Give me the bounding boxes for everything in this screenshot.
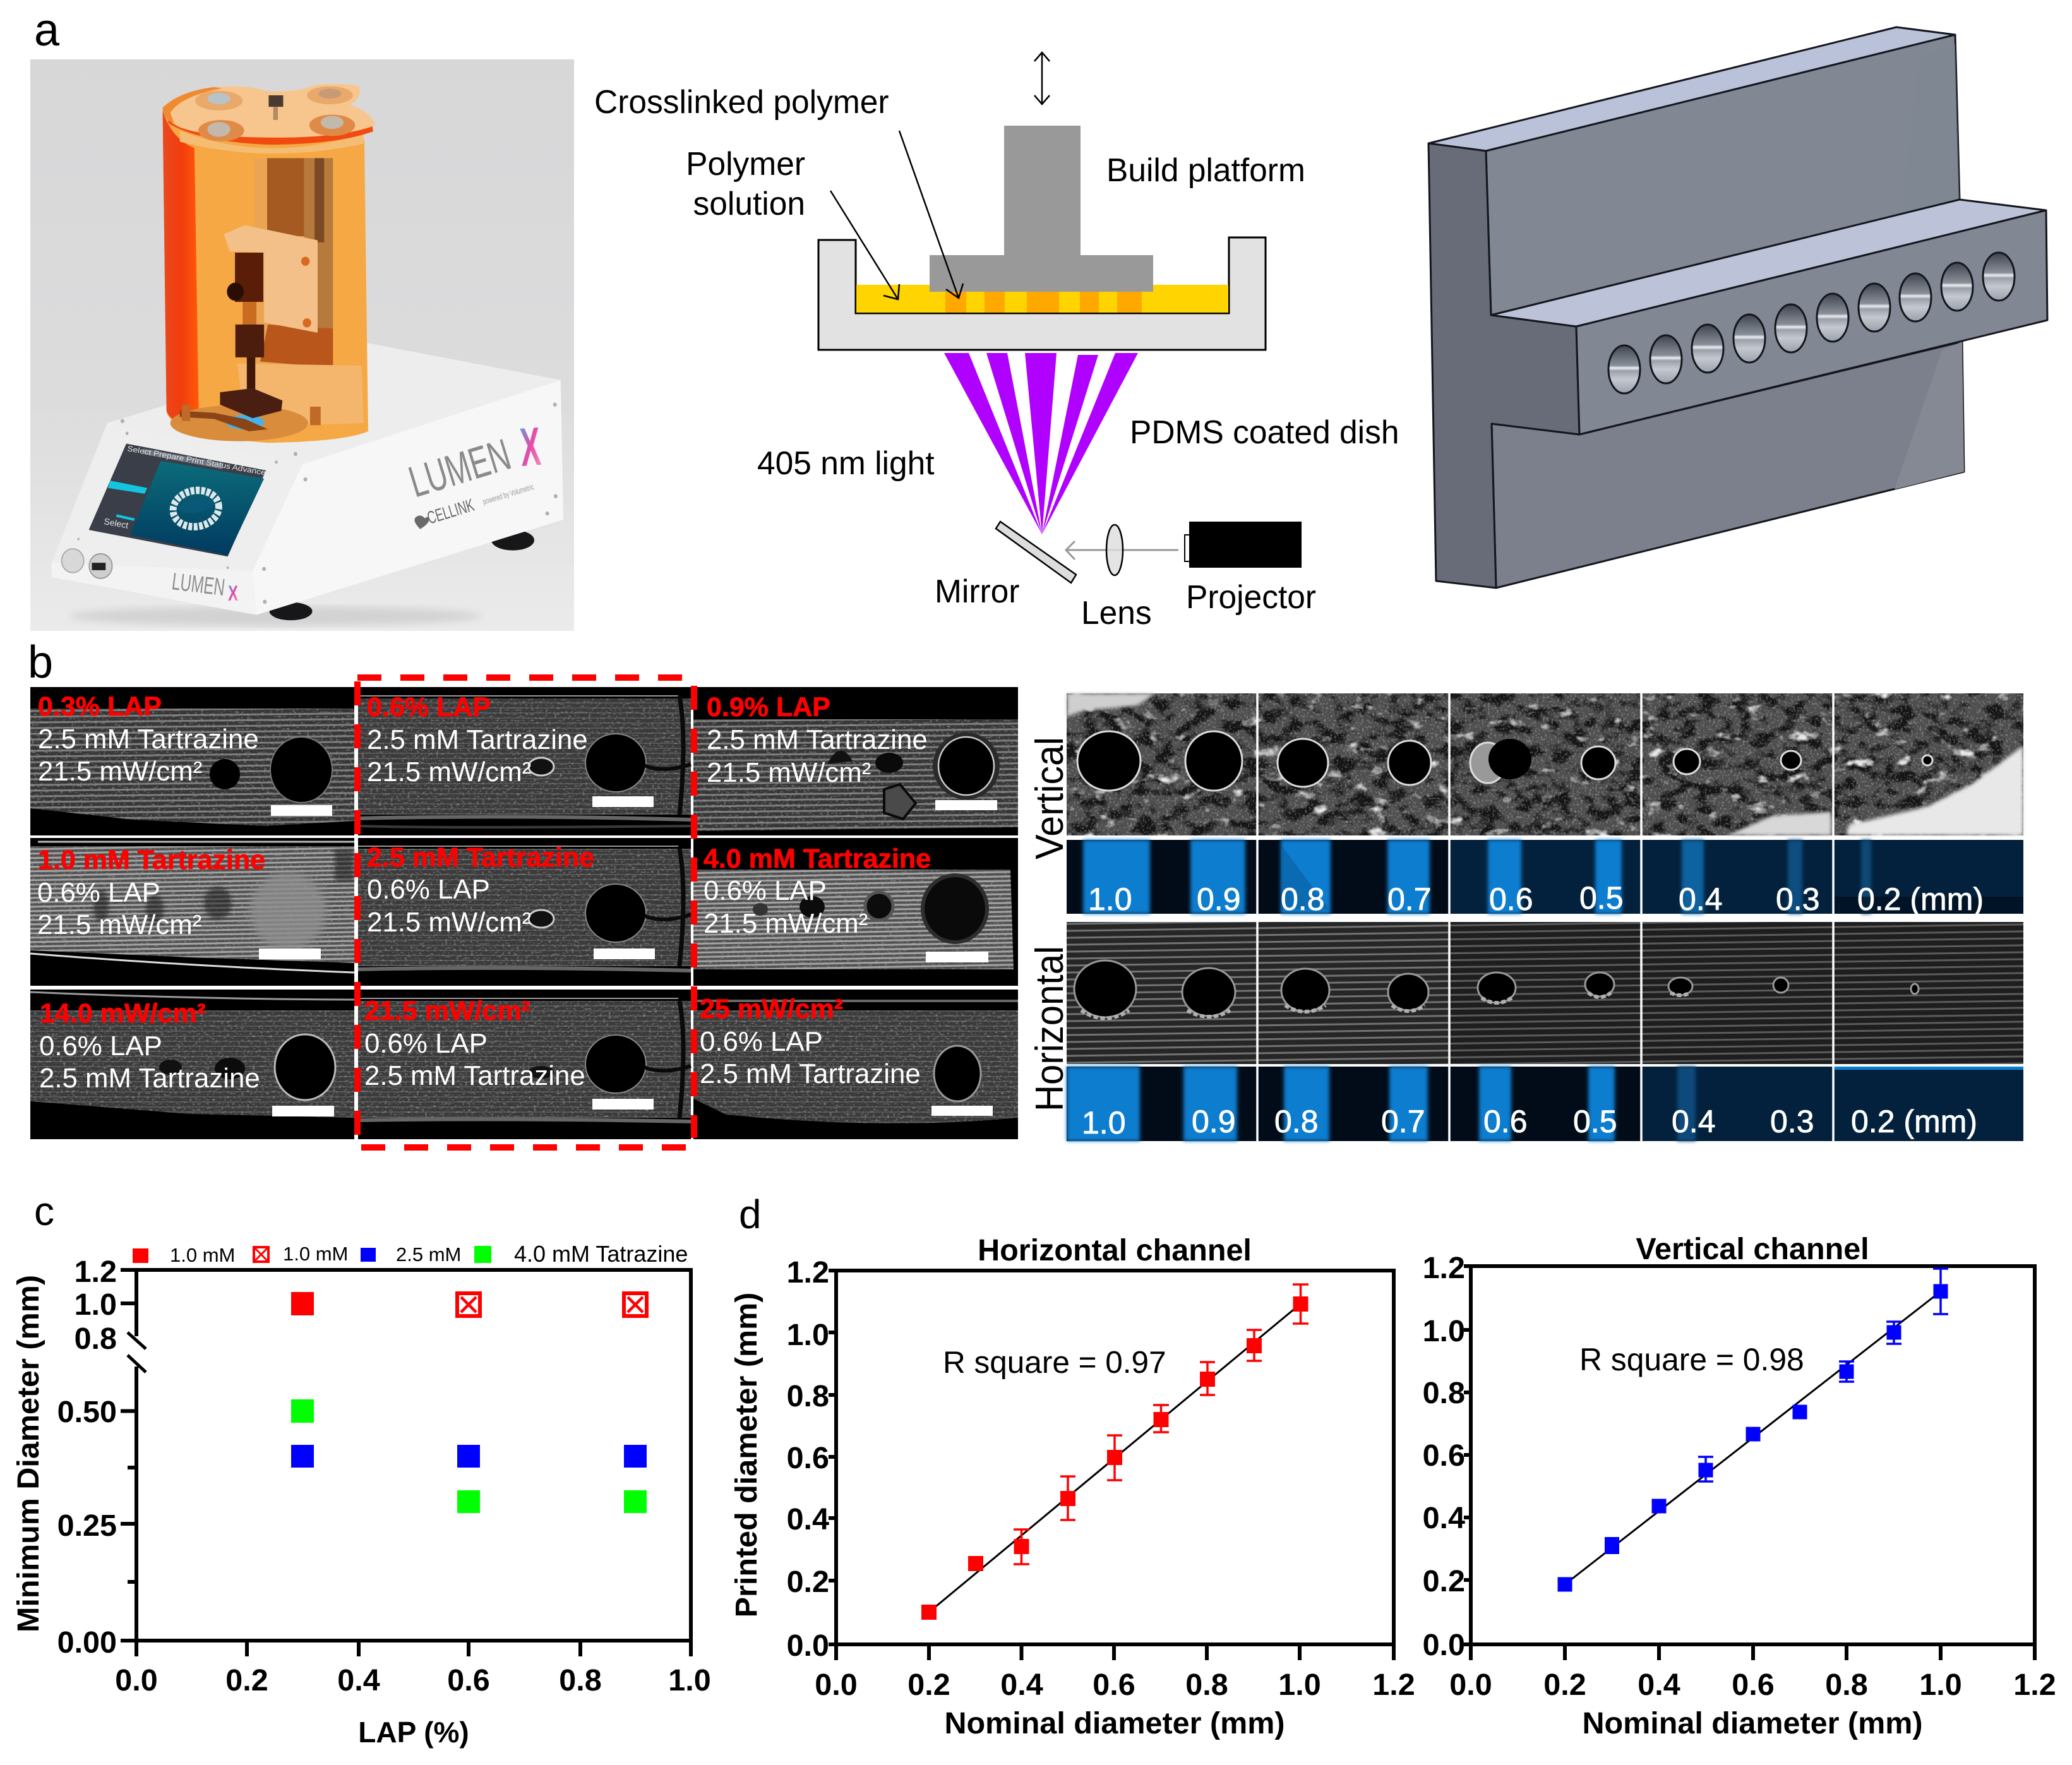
icon: vertical double arrow [1034, 52, 1050, 104]
panel: horizontal channel fluorescence: 0.6 [1483, 1104, 1528, 1139]
panel: horizontal channel fluorescence: 0.9 [1192, 1104, 1236, 1139]
micrograph 14.0 mW/cm2: 14.0 mW/cm² [40, 998, 206, 1029]
panel: chart c minimum diameter [11, 1241, 711, 1749]
micrograph 0.9% LAP: 0.9% LAP [707, 692, 830, 722]
fit line [1565, 1291, 1941, 1584]
x tick labels: 1.0 [668, 1663, 711, 1697]
panel: vertical channel fluorescence: 0.7 [1387, 882, 1432, 917]
panel: printing schematic [594, 52, 1399, 631]
label lens: Lens [1081, 594, 1152, 631]
build platform [930, 126, 1153, 292]
panel label b: b [28, 637, 53, 688]
text: LUMEN large: LUMEN [404, 429, 516, 506]
micrograph 25 mW/cm2 [693, 990, 1018, 1139]
schematic dish [818, 237, 1266, 350]
x tick labels: 0.4 [1638, 1668, 1680, 1702]
y tick labels [57, 1255, 117, 1660]
label 405 nm light: 405 nm light [757, 445, 935, 481]
micrograph 25 mW/cm2: 0.6% LAP [700, 1026, 823, 1057]
y tick labels: 0.4 [1423, 1501, 1465, 1535]
micrograph 1.0 mM Tartrazine: 21.5 mW/cm² [37, 909, 201, 940]
micrograph 2.5 mM Tartrazine: 0.6% LAP [367, 874, 490, 905]
label build platform: Build platform [1106, 152, 1305, 188]
y tick labels: 1.2 [75, 1255, 117, 1289]
panel: horizontal channel fluorescence [1067, 1067, 2023, 1141]
x tick labels: 0.6 [447, 1663, 490, 1697]
error bars [1014, 1284, 1308, 1564]
micrograph 4.0 mM Tartrazine [693, 838, 1018, 986]
panel: horizontal channel micrographs [1067, 922, 2023, 1064]
text: powered by Volumetric: powered by Volumetric [481, 482, 536, 506]
text: front LUMEN: LUMEN [171, 568, 226, 601]
micrograph 0.6% LAP [358, 687, 691, 835]
y tick labels: 1.0 [75, 1288, 117, 1322]
micrograph 21.5 mW/cm2: 2.5 mM Tartrazine [364, 1060, 585, 1091]
label mirror: Mirror [935, 573, 1019, 609]
error bars [1698, 1269, 1948, 1481]
y tick labels: 0.0 [1423, 1628, 1465, 1662]
y tick labels [787, 1255, 829, 1663]
x axis title: LAP (%) [358, 1716, 469, 1749]
y tick labels: 0.00 [57, 1625, 117, 1660]
axis break [128, 1332, 146, 1372]
x tick labels [115, 1663, 711, 1697]
chart title: Vertical channel [1636, 1232, 1869, 1266]
arrow: crosslinked polymer [899, 131, 963, 298]
y tick labels: 0.2 [787, 1565, 829, 1599]
axes frame [1471, 1266, 2035, 1644]
ticks [121, 1270, 691, 1656]
micrograph 0.3% LAP: 2.5 mM Tartrazine [38, 724, 259, 755]
data markers [291, 1292, 647, 1513]
y tick labels: 0.0 [787, 1629, 829, 1663]
micrograph 0.3% LAP [30, 687, 354, 835]
panel: vertical channel fluorescence: 0.5 [1579, 880, 1624, 916]
chart title: Horizontal channel [978, 1233, 1252, 1267]
micrograph 21.5 mW/cm2 [358, 990, 691, 1139]
panel: vertical channel fluorescence: 0.4 [1679, 882, 1723, 917]
x tick labels: 0.4 [1000, 1668, 1043, 1702]
panel label c: c [34, 1188, 54, 1234]
micrograph 1.0 mM Tartrazine: 1.0 mM Tartrazine [38, 845, 265, 875]
channel holes [1608, 253, 2015, 393]
legend [133, 1241, 688, 1267]
polymer solution [856, 285, 1228, 313]
x tick labels: 0.2 [225, 1663, 268, 1697]
micrograph 0.3% LAP: 0.3% LAP [38, 691, 162, 722]
data markers [1557, 1284, 1948, 1591]
y tick labels: 1.2 [787, 1255, 829, 1289]
x tick labels: 0.8 [1825, 1668, 1868, 1702]
panel: vertical channel fluorescence: 0.9 [1197, 882, 1241, 917]
label Horizontal: Horizontal [1028, 946, 1072, 1111]
label polymer solution: Polymer [686, 145, 805, 182]
panel: Lumen X printer photo [30, 59, 574, 631]
panel: chart vertical channel [1423, 1232, 2056, 1740]
x tick labels: 0.4 [337, 1663, 380, 1697]
r square note: R square = 0.97 [943, 1345, 1166, 1380]
ticks [829, 1271, 1394, 1660]
panel: LAP and tartrazine micrographs [30, 678, 1018, 1147]
fit line [929, 1304, 1300, 1612]
x tick labels: 0.8 [1185, 1668, 1228, 1702]
micrograph 2.5 mM Tartrazine: 2.5 mM Tartrazine [367, 842, 594, 873]
panel: vertical channel fluorescence: 0.6 [1489, 882, 1533, 917]
x tick labels: 0.8 [559, 1663, 602, 1697]
legend: 1.0 mM [283, 1243, 348, 1265]
axes frame [136, 1270, 691, 1641]
micrograph 1.0 mM Tartrazine: 0.6% LAP [37, 877, 160, 908]
x tick labels: 0.0 [815, 1668, 858, 1702]
legend: 4.0 mM Tatrazine [514, 1241, 688, 1267]
y tick labels: 1.2 [1423, 1251, 1465, 1285]
x tick labels: 0.2 [1543, 1668, 1586, 1702]
y tick labels: 0.8 [75, 1322, 117, 1356]
x tick labels: 1.0 [1919, 1668, 1962, 1702]
micrograph 4.0 mM Tartrazine: 21.5 mW/cm² [704, 908, 868, 939]
x axis title: Nominal diameter (mm) [945, 1706, 1285, 1740]
micrograph 25 mW/cm2: 25 mW/cm² [700, 994, 843, 1024]
mirror [996, 522, 1076, 583]
red dashed highlight box [357, 678, 694, 1147]
r square note: R square = 0.98 [1579, 1342, 1804, 1377]
y tick labels: 0.8 [787, 1379, 829, 1413]
y tick labels: 0.4 [787, 1502, 829, 1536]
y tick labels: 1.0 [787, 1318, 829, 1352]
panel: vertical channel fluorescence [1067, 840, 2023, 917]
micrograph 0.6% LAP: 2.5 mM Tartrazine [367, 724, 588, 755]
x tick labels [1449, 1668, 2056, 1702]
label Vertical: Vertical [1028, 737, 1072, 859]
panel label d: d [739, 1192, 762, 1237]
panel: horizontal channel fluorescence: 0.3 [1770, 1104, 1814, 1139]
x tick labels: 1.0 [1278, 1668, 1321, 1702]
x tick labels: 0.6 [1093, 1668, 1135, 1702]
text: CELLINK: CELLINK [425, 495, 477, 528]
panel: horizontal channel fluorescence: 0.8 [1274, 1104, 1319, 1139]
text: touch screen tabs: Select Prepare Print Status Advanced [126, 444, 271, 478]
x axis title: Nominal diameter (mm) [1583, 1706, 1922, 1740]
micrograph 25 mW/cm2: 2.5 mM Tartrazine [700, 1058, 921, 1089]
lens [1106, 525, 1123, 575]
micrograph 21.5 mW/cm2: 21.5 mW/cm² [364, 996, 530, 1026]
projector [1185, 522, 1302, 568]
panel: horizontal channel fluorescence: 0.4 [1672, 1104, 1716, 1139]
y tick labels [1423, 1251, 1465, 1662]
x tick labels [815, 1668, 1415, 1702]
light path arrow [1066, 541, 1178, 559]
y tick labels: 0.25 [57, 1509, 117, 1543]
micrograph 1.0 mM Tartrazine [30, 838, 354, 986]
y tick labels: 0.50 [57, 1395, 117, 1429]
x tick labels: 0.0 [115, 1663, 158, 1697]
micrograph 14.0 mW/cm2: 0.6% LAP [39, 1031, 162, 1062]
label polymer solution: solution [693, 185, 805, 222]
y tick labels: 0.8 [1423, 1376, 1465, 1410]
panel: vertical channel fluorescence: 1.0 [1088, 882, 1132, 917]
x tick labels: 1.2 [1372, 1668, 1415, 1702]
panel: horizontal channel fluorescence: 0.2 (mm) [1851, 1104, 1977, 1139]
405 nm light beams [944, 353, 1138, 534]
micrograph 0.6% LAP: 0.6% LAP [367, 692, 491, 722]
label crosslinked polymer: Crosslinked polymer [594, 83, 889, 120]
ticks [1464, 1266, 2035, 1660]
y tick labels: 0.6 [787, 1441, 829, 1475]
micrograph 21.5 mW/cm2: 0.6% LAP [364, 1028, 488, 1059]
data markers [921, 1296, 1308, 1620]
column separators [1257, 693, 1833, 1141]
x tick labels: 0.6 [1732, 1668, 1775, 1702]
micrograph 0.9% LAP: 21.5 mW/cm² [707, 757, 871, 788]
legend: 2.5 mM [396, 1243, 461, 1265]
panel: horizontal channel fluorescence: 0.7 [1381, 1104, 1425, 1139]
micrograph 0.3% LAP: 21.5 mW/cm² [38, 756, 202, 787]
label projector: Projector [1186, 578, 1316, 615]
x tick labels: 0.0 [1449, 1668, 1492, 1702]
panel: vertical channel fluorescence: 0.3 [1776, 882, 1820, 917]
panel: horizontal channel fluorescence: 1.0 [1082, 1105, 1126, 1140]
y axis title: Minimum Diameter (mm) [11, 1275, 45, 1632]
y tick labels: 0.6 [1423, 1439, 1465, 1473]
panel: horizontal channel fluorescence: 0.5 [1573, 1104, 1617, 1139]
micrograph 0.9% LAP: 2.5 mM Tartrazine [707, 724, 928, 755]
crosslinked segments [945, 292, 1142, 313]
micrograph 0.9% LAP [693, 687, 1018, 835]
x tick labels: 0.2 [907, 1668, 950, 1702]
micrograph 2.5 mM Tartrazine [358, 838, 691, 986]
micrograph 0.6% LAP: 21.5 mW/cm² [367, 757, 531, 787]
text: front X: X [228, 582, 238, 606]
y axis title: Printed diameter (mm) [729, 1293, 764, 1617]
label PDMS coated dish: PDMS coated dish [1130, 414, 1399, 450]
y tick labels: 0.2 [1423, 1564, 1465, 1598]
x tick labels: 1.2 [2013, 1668, 2056, 1702]
panel: chart horizontal channel [729, 1233, 1415, 1740]
y tick labels: 1.0 [1423, 1314, 1465, 1348]
panel: vertical channel fluorescence: 0.2 (mm) [1857, 882, 1984, 917]
panel label a: a [34, 5, 60, 56]
arrow: polymer solution [830, 191, 899, 299]
panel: vertical channel micrographs [1067, 693, 2023, 835]
micrograph 14.0 mW/cm2 [30, 990, 354, 1139]
micrograph 4.0 mM Tartrazine: 0.6% LAP [704, 875, 827, 906]
panel: 3D channel model [1428, 27, 2047, 588]
panel: vertical channel fluorescence: 0.8 [1281, 882, 1325, 917]
micrograph 14.0 mW/cm2: 2.5 mM Tartrazine [39, 1063, 260, 1094]
text: touch screen select button: Select [103, 516, 129, 530]
legend: 1.0 mM [170, 1244, 235, 1266]
micrograph 4.0 mM Tartrazine: 4.0 mM Tartrazine [704, 844, 931, 874]
micrograph 2.5 mM Tartrazine: 21.5 mW/cm² [367, 907, 531, 938]
text: X large: X [518, 416, 542, 478]
axes frame [836, 1271, 1394, 1644]
